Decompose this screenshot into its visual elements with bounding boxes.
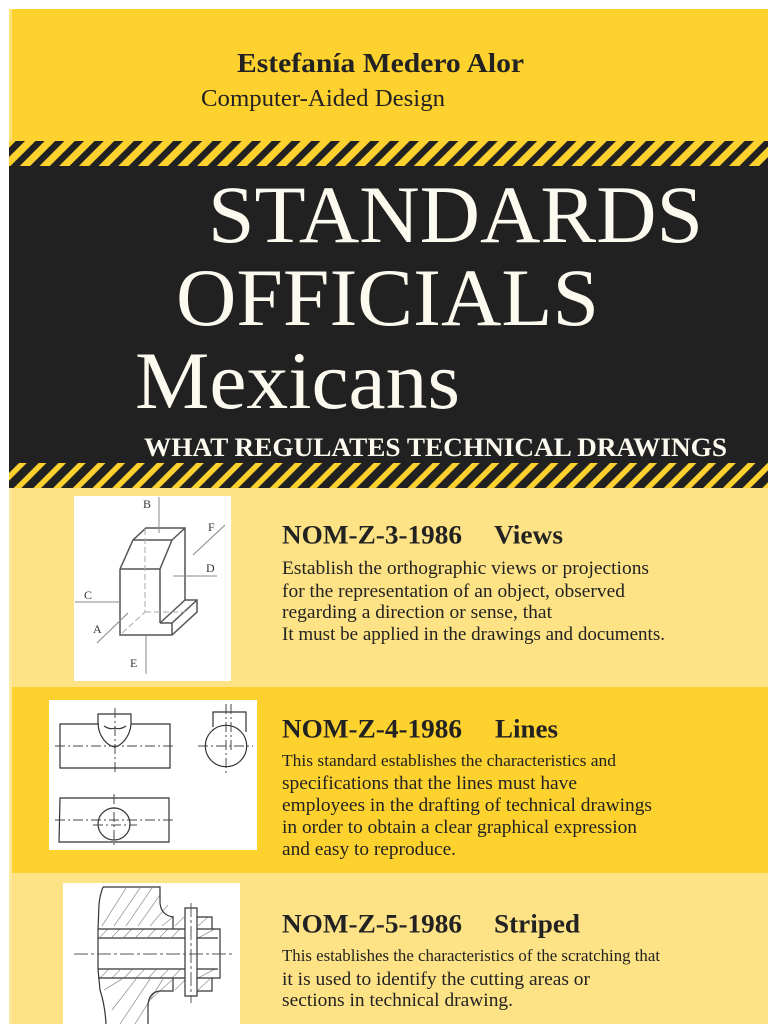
panel: NOM-Z-5-1986 Striped [9, 873, 768, 1024]
text block: lines: in order to obtain a clear graphical expression [282, 818, 637, 838]
text block: lines: This standard establishes the characteristics and [282, 751, 617, 770]
title subheading: WHAT REGULATES TECHNICAL DRAWINGS [144, 433, 727, 462]
heading: views: NOM-Z-3-1986 [282, 520, 462, 550]
text block: striped [282, 946, 660, 1011]
text block: lines: and easy to reproduce. [282, 840, 456, 860]
text block: views [282, 559, 665, 645]
text block: views: Establish the orthographic views or projections [282, 559, 649, 579]
diagram: views: A [93, 622, 102, 636]
title line 2: OFFICIALS [176, 252, 599, 343]
panel: author header [9, 9, 768, 141]
heading: striped: NOM-Z-5-1986 [282, 910, 462, 938]
diagram: views: F [208, 520, 215, 534]
text block: lines [282, 751, 652, 860]
diagram: striped [63, 883, 240, 1024]
heading: lines: NOM-Z-4-1986 [282, 714, 462, 744]
diagram: views: C [84, 588, 92, 602]
text block: views: regarding a direction or sense, that [282, 603, 553, 623]
panel: title block [9, 166, 768, 463]
panel: NOM-Z-3-1986 Views [9, 488, 768, 687]
panel: NOM-Z-4-1986 Lines: Lines [495, 714, 558, 744]
text block: views: for the representation of an object, observed [282, 582, 626, 602]
panel: NOM-Z-5-1986 Striped: Striped [494, 910, 581, 938]
title line 3: Mexicans [135, 335, 460, 426]
text block: striped: This establishes the characteristics of the scratching that [282, 946, 660, 965]
title line 1: STANDARDS [208, 169, 703, 260]
hazard stripe: bottom [9, 463, 768, 488]
hazard stripe: top [9, 141, 768, 166]
text block: views: It must be applied in the drawings and documents. [282, 625, 665, 645]
diagram: lines [49, 700, 257, 850]
text block: lines: employees in the drafting of technical drawings [282, 796, 652, 816]
panel: NOM-Z-4-1986 Lines [9, 687, 768, 873]
course subtitle: Computer-Aided Design [201, 85, 445, 112]
diagram: views [74, 496, 231, 681]
diagram: views: D [206, 561, 215, 575]
author name: Estefanía Medero Alor [237, 48, 524, 78]
text block: striped: sections in technical drawing. [282, 991, 513, 1011]
text block: striped: it is used to identify the cutting areas or [282, 970, 590, 990]
panel: NOM-Z-3-1986 Views: Views [494, 520, 563, 550]
text block: lines: specifications that the lines must have [282, 774, 577, 794]
diagram: views: E [130, 656, 137, 670]
diagram: views: B [143, 497, 151, 511]
